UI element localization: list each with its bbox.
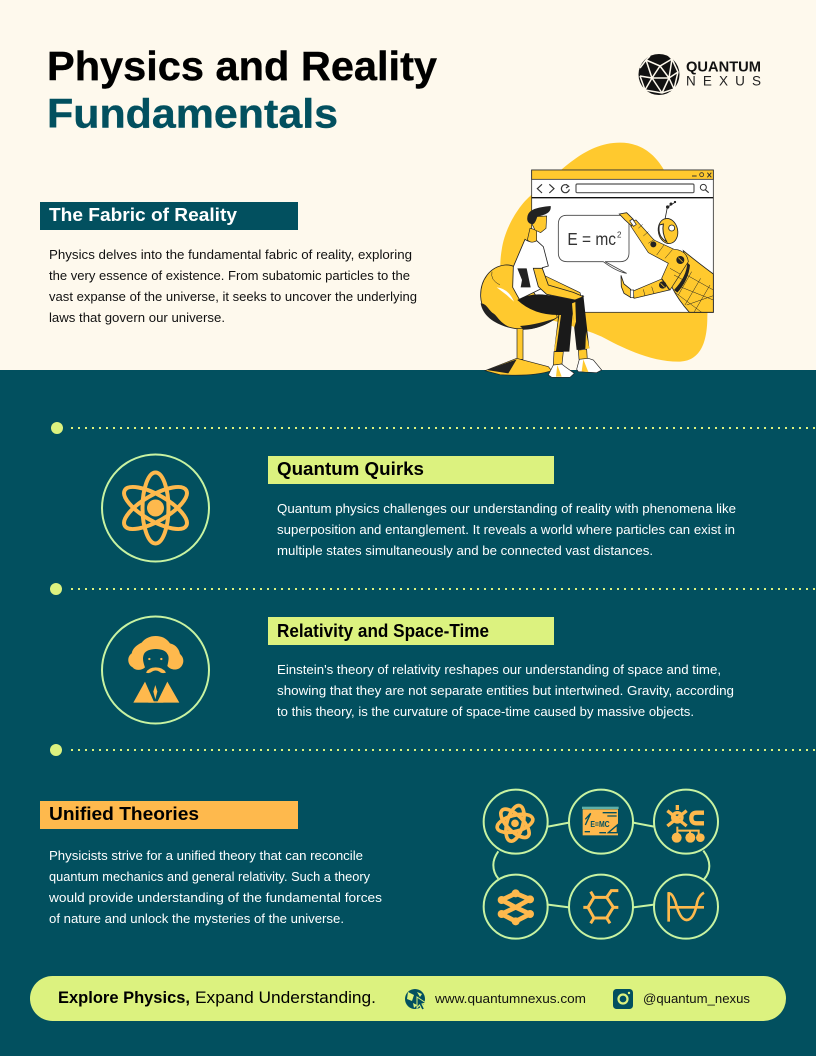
title: Physics and Reality	[47, 43, 437, 89]
text block: unified theories: of nature and unlock the mysteries of the universe.	[49, 911, 344, 926]
divider: dotted line 3	[50, 744, 816, 756]
text block: quantum quirks: Quantum physics challenges our understanding of reality with phenomena like	[277, 501, 736, 516]
text block: unified theories: quantum mechanics and general relativity. Such a theory	[49, 869, 370, 884]
text block: relativity: Einstein's theory of relativity reshapes our understanding of space and time,	[277, 662, 721, 677]
text block: unified theories: Physicists strive for a unified theory that can reconcile	[49, 848, 363, 863]
heading: Quantum Quirks	[268, 456, 554, 484]
text block: relativity: to this theory, is the curvature of space-time caused by massive objects.	[277, 704, 694, 719]
logo: Quantum Nexus	[638, 54, 761, 95]
text block: quantum quirks	[277, 501, 736, 558]
illustration: man and robot with browser window	[481, 143, 713, 377]
icon: globe with cursor	[405, 989, 426, 1010]
icon: Einstein in circle	[102, 616, 209, 724]
logo: Quantum Nexus: NEXUS	[686, 74, 761, 88]
call to action: Explore Physics,	[58, 988, 190, 1007]
icon: molecule	[583, 891, 618, 923]
illustration: man and robot with browser window: E = mc	[567, 229, 616, 249]
text block: fabric of reality	[49, 247, 417, 325]
icon: instagram	[613, 989, 633, 1009]
text block: relativity: showing that they are not separate entities but intertwined. Gravity, according	[277, 683, 734, 698]
heading: The Fabric of Reality: The Fabric of Reality	[49, 205, 237, 225]
heading: Relativity and Space-Time: Relativity and Space-Time	[277, 621, 489, 641]
logo: Quantum Nexus: QUANTUM	[686, 58, 761, 76]
heading: Unified Theories: Unified Theories	[49, 804, 199, 824]
text block: unified theories	[48, 848, 383, 926]
instagram handle: @quantum_nexus	[643, 991, 750, 1006]
diagram: six connected theory icons	[484, 790, 718, 939]
text block: fabric of reality: Physics delves into the fundamental fabric of reality, exploring	[49, 247, 412, 262]
text block: quantum quirks: superposition and entanglement. It reveals a world where particles can exist in	[277, 522, 735, 537]
icon: atom small	[495, 804, 535, 843]
heading: The Fabric of Reality	[40, 202, 298, 230]
icon: formula board	[582, 807, 619, 835]
text block: fabric of reality: laws that govern our universe.	[49, 310, 225, 325]
divider: dotted line 1	[51, 422, 816, 434]
icon: atom in circle	[102, 454, 209, 562]
text block: fabric of reality: vast expanse of the universe, it seeks to uncover the underlying	[49, 289, 417, 304]
icon: neural network	[498, 889, 534, 925]
title: Fundamentals	[47, 90, 338, 136]
illustration: man and robot with browser window: 2	[617, 230, 622, 239]
text block: fabric of reality: the very essence of existence. From subatomic particles to the	[49, 268, 410, 283]
website: www.quantumnexus.com	[434, 991, 586, 1006]
heading: Relativity and Space-Time	[268, 617, 554, 645]
text block: relativity	[277, 662, 734, 719]
text block: quantum quirks: multiple states simultaneously and be connected vast distances.	[277, 543, 653, 558]
heading: Quantum Quirks: Quantum Quirks	[277, 459, 424, 479]
icon: wave function	[669, 893, 704, 922]
call to action	[58, 988, 376, 1007]
title	[47, 43, 437, 136]
icon: formula board: E=MC	[590, 819, 610, 829]
heading: Unified Theories	[40, 801, 298, 829]
call to action: Expand Understanding.	[195, 988, 376, 1007]
divider: dotted line 2	[50, 583, 816, 595]
footer pill	[30, 976, 786, 1021]
panel: dark teal lower section	[0, 370, 816, 1056]
icon: atom and circuit	[667, 805, 705, 843]
text block: unified theories: would provide understanding of the fundamental forces	[48, 890, 383, 905]
